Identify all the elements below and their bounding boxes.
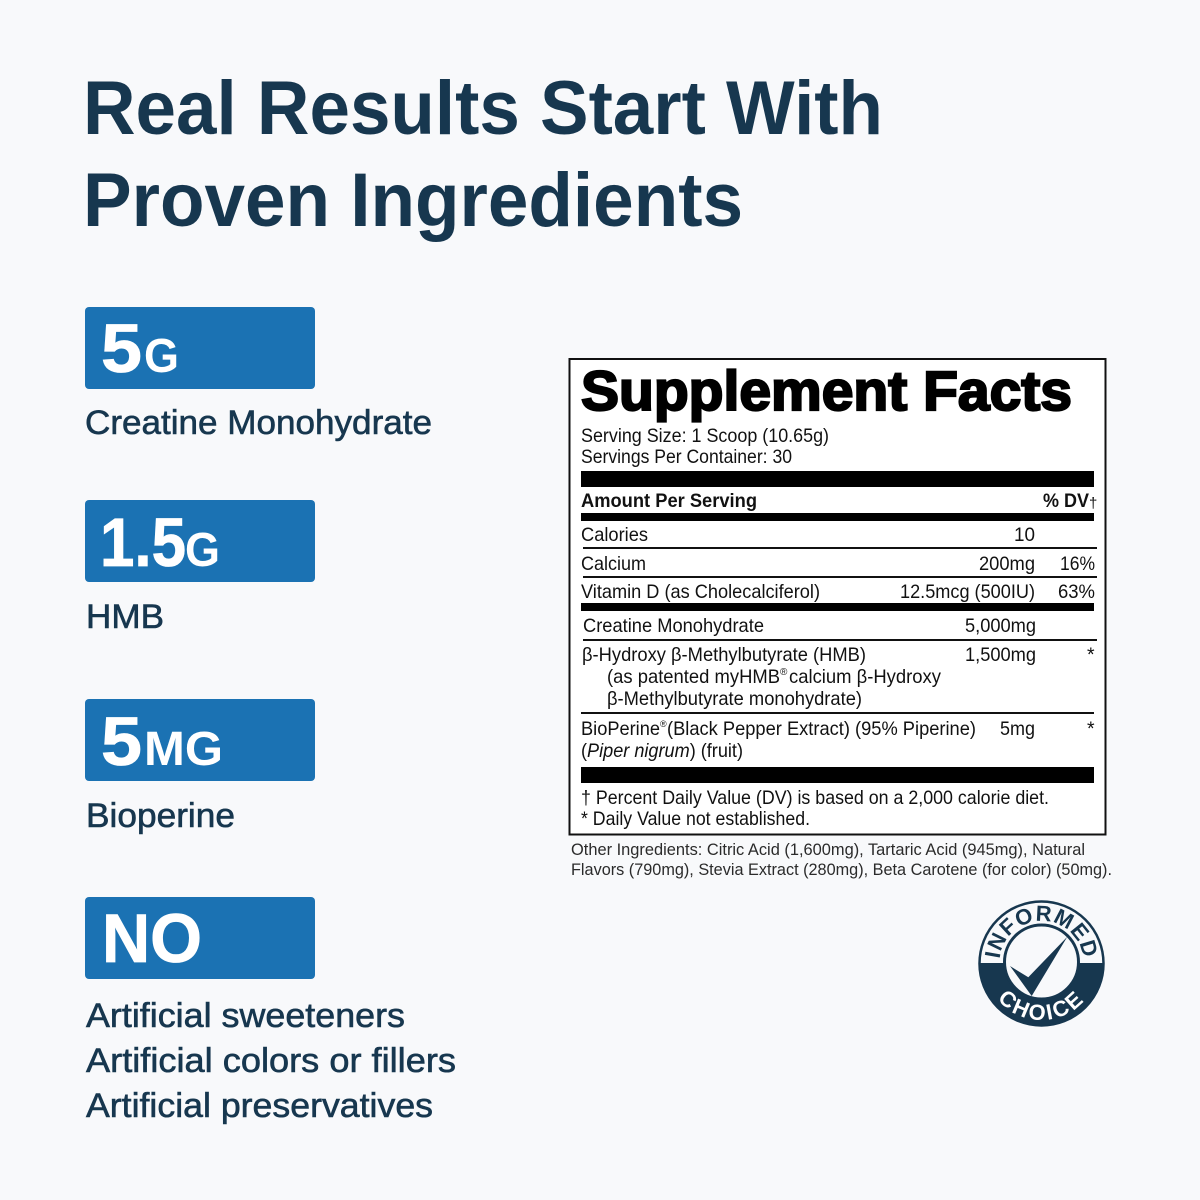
table header: Amount Per Serving	[581, 490, 757, 512]
label: hmb: HMB	[86, 598, 164, 636]
other ingredients: Other Ingredients: Citric Acid (1,600mg), Tartaric Acid (945mg), Natural	[571, 840, 1085, 859]
row: hmb: *	[1087, 644, 1095, 666]
row: vitamin d: 63%	[1058, 581, 1095, 603]
row: hmb: ®	[780, 667, 788, 678]
row: bioperine: BioPerine	[581, 718, 660, 740]
icon: informed choice badge	[978, 900, 1105, 1027]
stat: 5mg bioperine	[85, 699, 315, 835]
serving information	[581, 425, 829, 468]
badge: no: NO	[102, 900, 202, 977]
footnotes	[581, 787, 1049, 830]
row: calories: 10	[1014, 524, 1035, 546]
badge: 1.5g: 1.5	[100, 504, 186, 581]
badge: 1.5g	[85, 500, 315, 582]
row: hmb: 1,500mg	[965, 644, 1036, 666]
row: hmb	[582, 644, 1095, 710]
title: Proven Ingredients	[83, 158, 743, 243]
label: creatine monohydrate: Creatine Monohydrate	[85, 404, 432, 442]
stat: 5g creatine monohydrate	[85, 307, 432, 442]
footnotes: * Daily Value not established.	[581, 808, 810, 830]
row: vitamin d	[581, 581, 1095, 603]
row: bioperine	[581, 718, 1095, 762]
row: vitamin d: 12.5mcg (500IU)	[900, 581, 1035, 603]
row: vitamin d: Vitamin D (as Cholecalciferol)	[581, 581, 820, 603]
icon: check mark	[1010, 937, 1067, 996]
table header	[581, 490, 1097, 512]
title	[83, 66, 883, 243]
badge: 5mg: 5	[101, 703, 142, 780]
badge: 1.5g: G	[185, 524, 220, 577]
badge: no	[85, 897, 315, 979]
badge: 5mg	[85, 699, 315, 781]
row: creatine monohydrate: 5,000mg	[965, 615, 1036, 637]
badge text: choice: CHOICE	[1000, 990, 1084, 1020]
row: hmb: (as patented myHMB	[607, 666, 780, 688]
row: bioperine: (Black Pepper Extract) (95% Piperine)	[667, 718, 976, 740]
stat: no artificial ingredients	[85, 897, 456, 1125]
serving information: Servings Per Container: 30	[581, 446, 792, 468]
footnotes: † Percent Daily Value (DV) is based on a 2,000 calorie diet.	[581, 787, 1049, 809]
panel: supplement facts	[570, 359, 1106, 834]
list: artificial exclusions: Artificial sweeteners	[86, 997, 405, 1035]
list: artificial exclusions: Artificial preservatives	[86, 1087, 433, 1125]
row: bioperine: 5mg	[1000, 718, 1035, 740]
row: calories: Calories	[581, 524, 648, 546]
stat: 1.5g hmb	[85, 500, 315, 636]
row: hmb: calcium β-Hydroxy	[789, 666, 941, 688]
list: artificial exclusions: Artificial colors or fillers	[86, 1042, 456, 1080]
badge text: informed: INFORMED	[984, 906, 1096, 958]
heading: supplement facts: Supplement Facts	[581, 359, 1072, 422]
list: artificial exclusions	[86, 997, 456, 1125]
row: calcium: 200mg	[979, 553, 1035, 575]
row: creatine monohydrate: Creatine Monohydrate	[583, 615, 764, 637]
table header: †	[1089, 495, 1097, 512]
table header: % DV	[1043, 490, 1089, 512]
title: Real Results Start With	[83, 66, 883, 151]
row: calcium	[581, 553, 1095, 575]
badge: 5g: 5	[101, 310, 142, 387]
badge: 5g	[85, 307, 315, 389]
row: calories	[581, 524, 1035, 546]
row: creatine monohydrate	[583, 615, 1036, 637]
row: bioperine: ®	[660, 719, 667, 729]
badge: 5g: G	[144, 330, 179, 383]
label: bioperine: Bioperine	[86, 797, 235, 835]
row: calcium: Calcium	[581, 553, 646, 575]
row: bioperine: (Piper nigrum) (fruit)	[581, 740, 743, 762]
other ingredients: Flavors (790mg), Stevia Extract (280mg), Beta Carotene (for color) (50mg).	[571, 860, 1112, 879]
row: bioperine: *	[1087, 718, 1095, 740]
badge: 5mg: MG	[144, 723, 223, 776]
row: hmb: β-Hydroxy β-Methylbutyrate (HMB)	[582, 644, 866, 666]
row: calcium: 16%	[1060, 553, 1095, 575]
serving information: Serving Size: 1 Scoop (10.65g)	[581, 425, 829, 447]
row: hmb: β-Methylbutyrate monohydrate)	[607, 688, 862, 710]
other ingredients	[571, 840, 1112, 879]
